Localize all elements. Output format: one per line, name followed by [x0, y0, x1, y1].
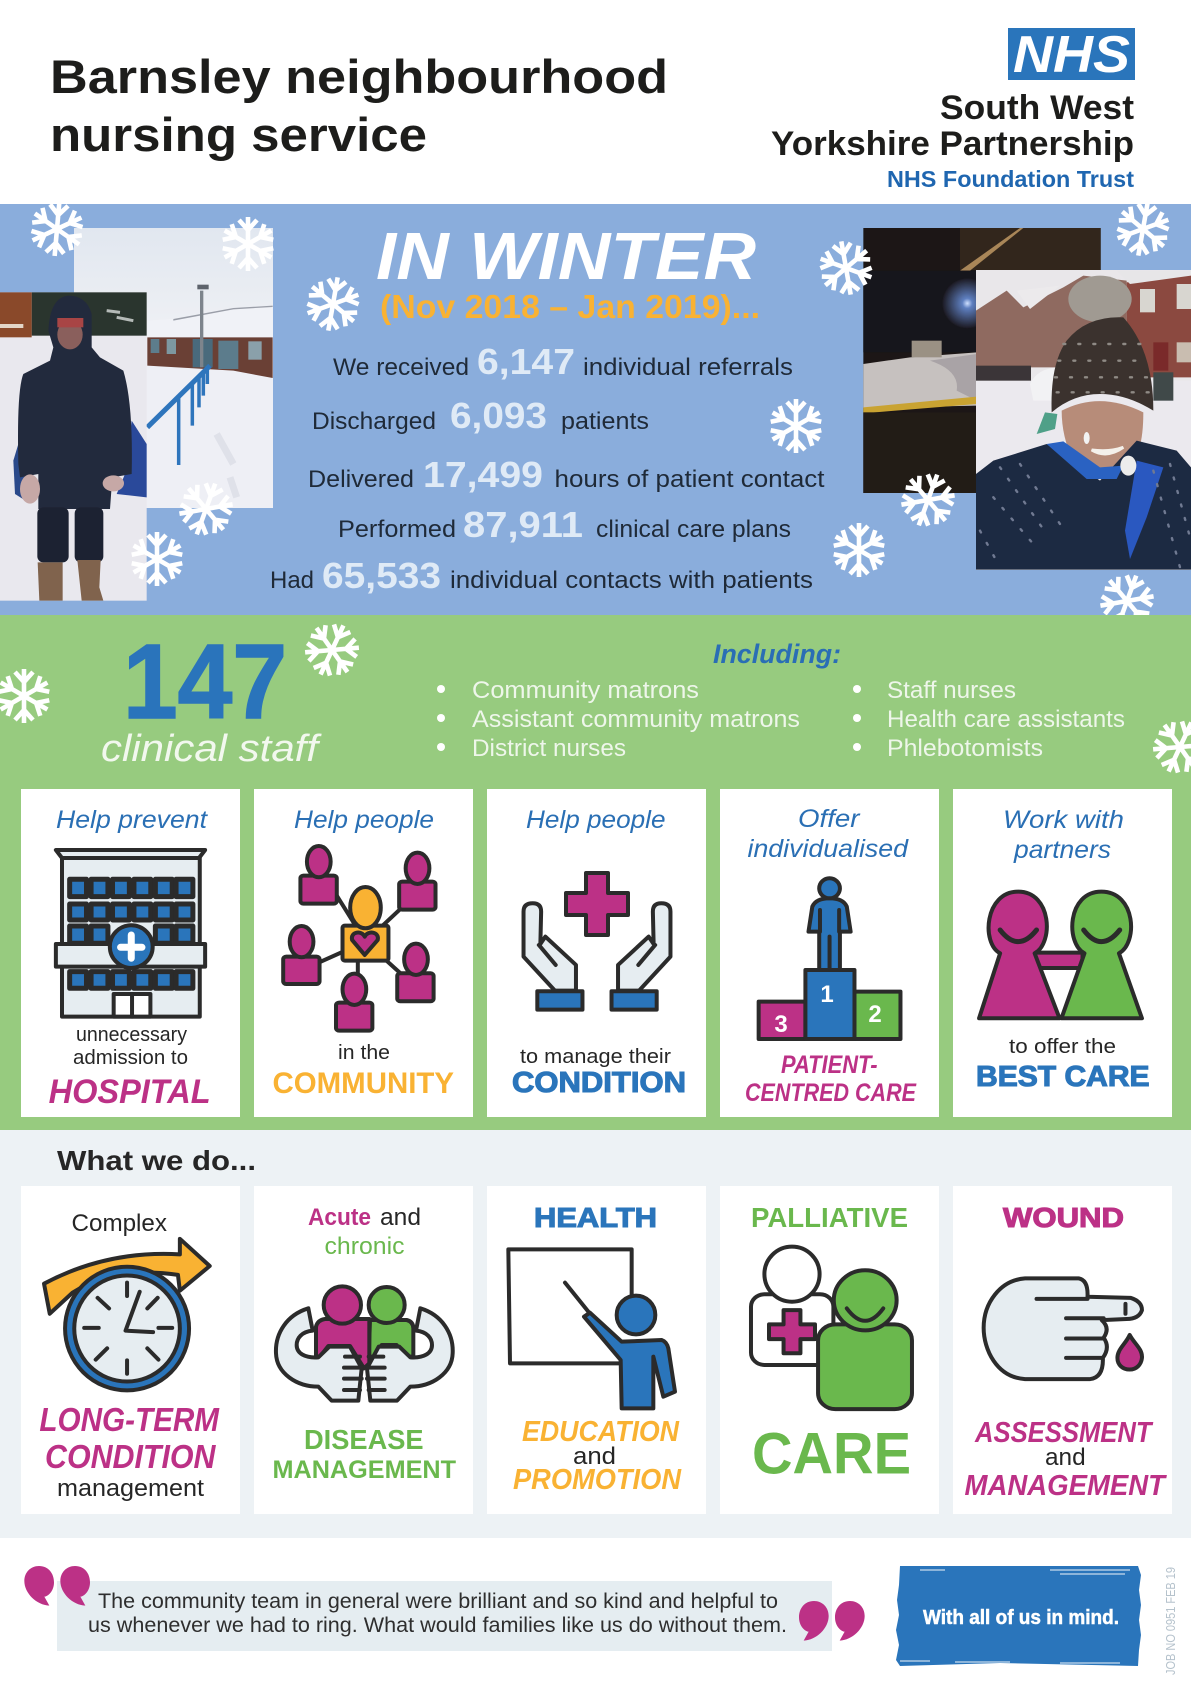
card: best care: [953, 789, 1172, 1117]
stat: discharged: Discharged: [312, 408, 436, 435]
card: community: Help people: [294, 806, 434, 834]
card: wound assessment: and: [1045, 1444, 1086, 1471]
icon: two figures: [979, 892, 1142, 1018]
card: hospital: [21, 789, 240, 1117]
icon: podium: [759, 878, 900, 1039]
stat: care plans: clinical care plans: [596, 516, 791, 543]
NHS logo: Yorkshire Partnership: [771, 125, 1134, 163]
list: staff roles column 1: Community matrons: [472, 677, 699, 704]
card: health education: PROMOTION: [513, 1464, 682, 1496]
list: staff roles column 2: Staff nurses: [887, 677, 1016, 704]
card: wound assessment: [953, 1186, 1172, 1514]
quote text: The community team in general were brilliant and so kind and helpful to: [98, 1590, 778, 1613]
card: health education: [487, 1186, 706, 1514]
card: condition: CONDITION: [512, 1067, 686, 1099]
card: condition: to manage their: [520, 1046, 671, 1068]
stat: referrals: [333, 341, 793, 382]
photo: night road: [863, 228, 1101, 493]
quote text: us whenever we had to ring. What would families like us do without them.: [88, 1614, 787, 1637]
card: long-term condition: [21, 1186, 240, 1514]
stat: discharged: 6,093: [450, 395, 547, 436]
photo: nurse selfie: [976, 270, 1191, 570]
panel: in winter: [0, 198, 1191, 636]
icon: podium: 1: [820, 981, 834, 1008]
icon: bleeding finger: [984, 1278, 1142, 1379]
icon: hospital building: [56, 850, 205, 1017]
stat: care plans: Performed: [338, 516, 456, 543]
heading: in winter: IN WINTER: [376, 219, 756, 294]
stat: individual contacts: [270, 555, 813, 596]
stat: hours of contact: hours of patient contact: [554, 466, 825, 493]
card: long-term condition: management: [57, 1475, 204, 1502]
heading: what we do: What we do...: [57, 1145, 256, 1176]
card: palliative care: PALLIATIVE: [751, 1202, 908, 1233]
card: hospital: HOSPITAL: [49, 1073, 211, 1111]
list: staff roles column 2: Phlebotomists: [887, 735, 1043, 762]
quote panel: [24, 1566, 865, 1651]
stat: hours of contact: [308, 454, 825, 495]
card: disease management: chronic: [324, 1233, 404, 1260]
card: disease management: and: [380, 1204, 421, 1231]
card: hospital: admission to: [73, 1047, 188, 1069]
card: disease management: Acute: [308, 1204, 371, 1231]
snowflakes: winter band: [27, 198, 1175, 636]
NHS logo: NHS Foundation Trust: [887, 166, 1134, 192]
card: palliative care: CARE: [752, 1422, 911, 1486]
card: health education: EDUCATION: [522, 1416, 680, 1448]
card: long-term condition: LONG-TERM: [39, 1401, 220, 1438]
staff count: 147: [123, 623, 287, 741]
NHS logo: South West: [940, 89, 1134, 127]
title: Barnsley neighbourhood: [50, 50, 668, 103]
list: staff roles column 2: [853, 677, 1125, 762]
stat: discharged: [312, 395, 649, 436]
card: disease management: MANAGEMENT: [272, 1456, 456, 1484]
icon: teacher at board: [508, 1249, 675, 1408]
list: staff roles column 1: Assistant community matrons: [472, 706, 800, 733]
card: wound assessment: ASSESSMENT: [974, 1417, 1154, 1449]
list: staff roles column 1: [437, 677, 800, 762]
card: patient-centred care: Offer: [798, 805, 861, 833]
card: community: [254, 789, 473, 1117]
panel: clinical staff: [0, 614, 1191, 1130]
icon: nurse and patient: [751, 1247, 912, 1409]
stat: individual contacts: Had: [270, 567, 314, 594]
card: patient-centred care: individualised: [748, 835, 909, 863]
banner: with all of us in mind: [896, 1566, 1141, 1666]
photo: snowy building: [73, 228, 273, 509]
card: health education: and: [573, 1443, 616, 1470]
snowflakes: staff band: [0, 614, 1191, 783]
card: palliative care: [720, 1186, 939, 1514]
card: wound assessment: MANAGEMENT: [964, 1470, 1167, 1502]
card: patient-centred care: PATIENT-: [781, 1051, 878, 1079]
card: hospital: Help prevent: [56, 806, 208, 834]
NHS logo: NHS: [1013, 26, 1130, 84]
stat: referrals: individual referrals: [583, 354, 793, 381]
staff label: clinical staff: [101, 728, 322, 770]
NHS logo: [771, 26, 1135, 192]
card: best care: partners: [1013, 836, 1111, 864]
stat: hours of contact: Delivered: [308, 466, 414, 493]
list: staff roles column 1: District nurses: [472, 735, 626, 762]
stat: discharged: patients: [561, 408, 649, 435]
card: hospital: unnecessary: [76, 1024, 187, 1046]
card: wound assessment: WOUND: [1003, 1202, 1124, 1233]
title: nursing service: [50, 108, 427, 161]
card: best care: Work with: [1003, 806, 1124, 834]
card: condition: [487, 789, 706, 1117]
photo: nurse in snow: [0, 292, 147, 601]
stat: referrals: We received: [333, 354, 469, 381]
stat: hours of contact: 17,499: [423, 454, 543, 495]
icon: podium: 2: [868, 1001, 882, 1028]
banner: with all of us in mind: With all of us in mind.: [923, 1607, 1119, 1629]
card: patient-centred care: [720, 789, 939, 1117]
icon: community network: [283, 846, 436, 1031]
card: patient-centred care: CENTRED CARE: [745, 1079, 917, 1107]
card: disease management: [254, 1186, 473, 1514]
card: long-term condition: Complex: [72, 1210, 167, 1237]
icon: hands holding cross: [524, 873, 670, 1010]
stat: care plans: 87,911: [463, 504, 583, 545]
card: condition: Help people: [526, 806, 666, 834]
job number: JOB NO 0951 FEB 19: [1163, 1567, 1178, 1675]
card: long-term condition: CONDITION: [45, 1438, 217, 1475]
card: health education: HEALTH: [534, 1202, 657, 1233]
heading: dates: (Nov 2018 – Jan 2019)...: [380, 288, 760, 325]
list: staff roles column 2: Health care assistants: [887, 706, 1125, 733]
icon: podium: 3: [774, 1011, 788, 1038]
opening quote marks: [24, 1566, 90, 1606]
stat: referrals: 6,147: [477, 341, 575, 382]
quote text: [88, 1590, 787, 1637]
card: community: COMMUNITY: [272, 1067, 454, 1100]
stat: care plans: [338, 504, 791, 545]
heading: including: Including:: [713, 639, 841, 669]
panel: what we do: [0, 1130, 1191, 1538]
card: community: in the: [338, 1042, 390, 1064]
stat: individual contacts: 65,533: [322, 555, 441, 596]
icon: clock with arrow: [44, 1239, 210, 1390]
card: best care: BEST CARE: [976, 1061, 1150, 1093]
stat: individual contacts: individual contacts with patients: [450, 567, 813, 594]
title: [50, 50, 668, 161]
card: best care: to offer the: [1009, 1036, 1116, 1058]
card: disease management: DISEASE: [304, 1424, 424, 1455]
closing quote marks: [799, 1601, 865, 1641]
icon: hands holding people: [276, 1286, 453, 1401]
